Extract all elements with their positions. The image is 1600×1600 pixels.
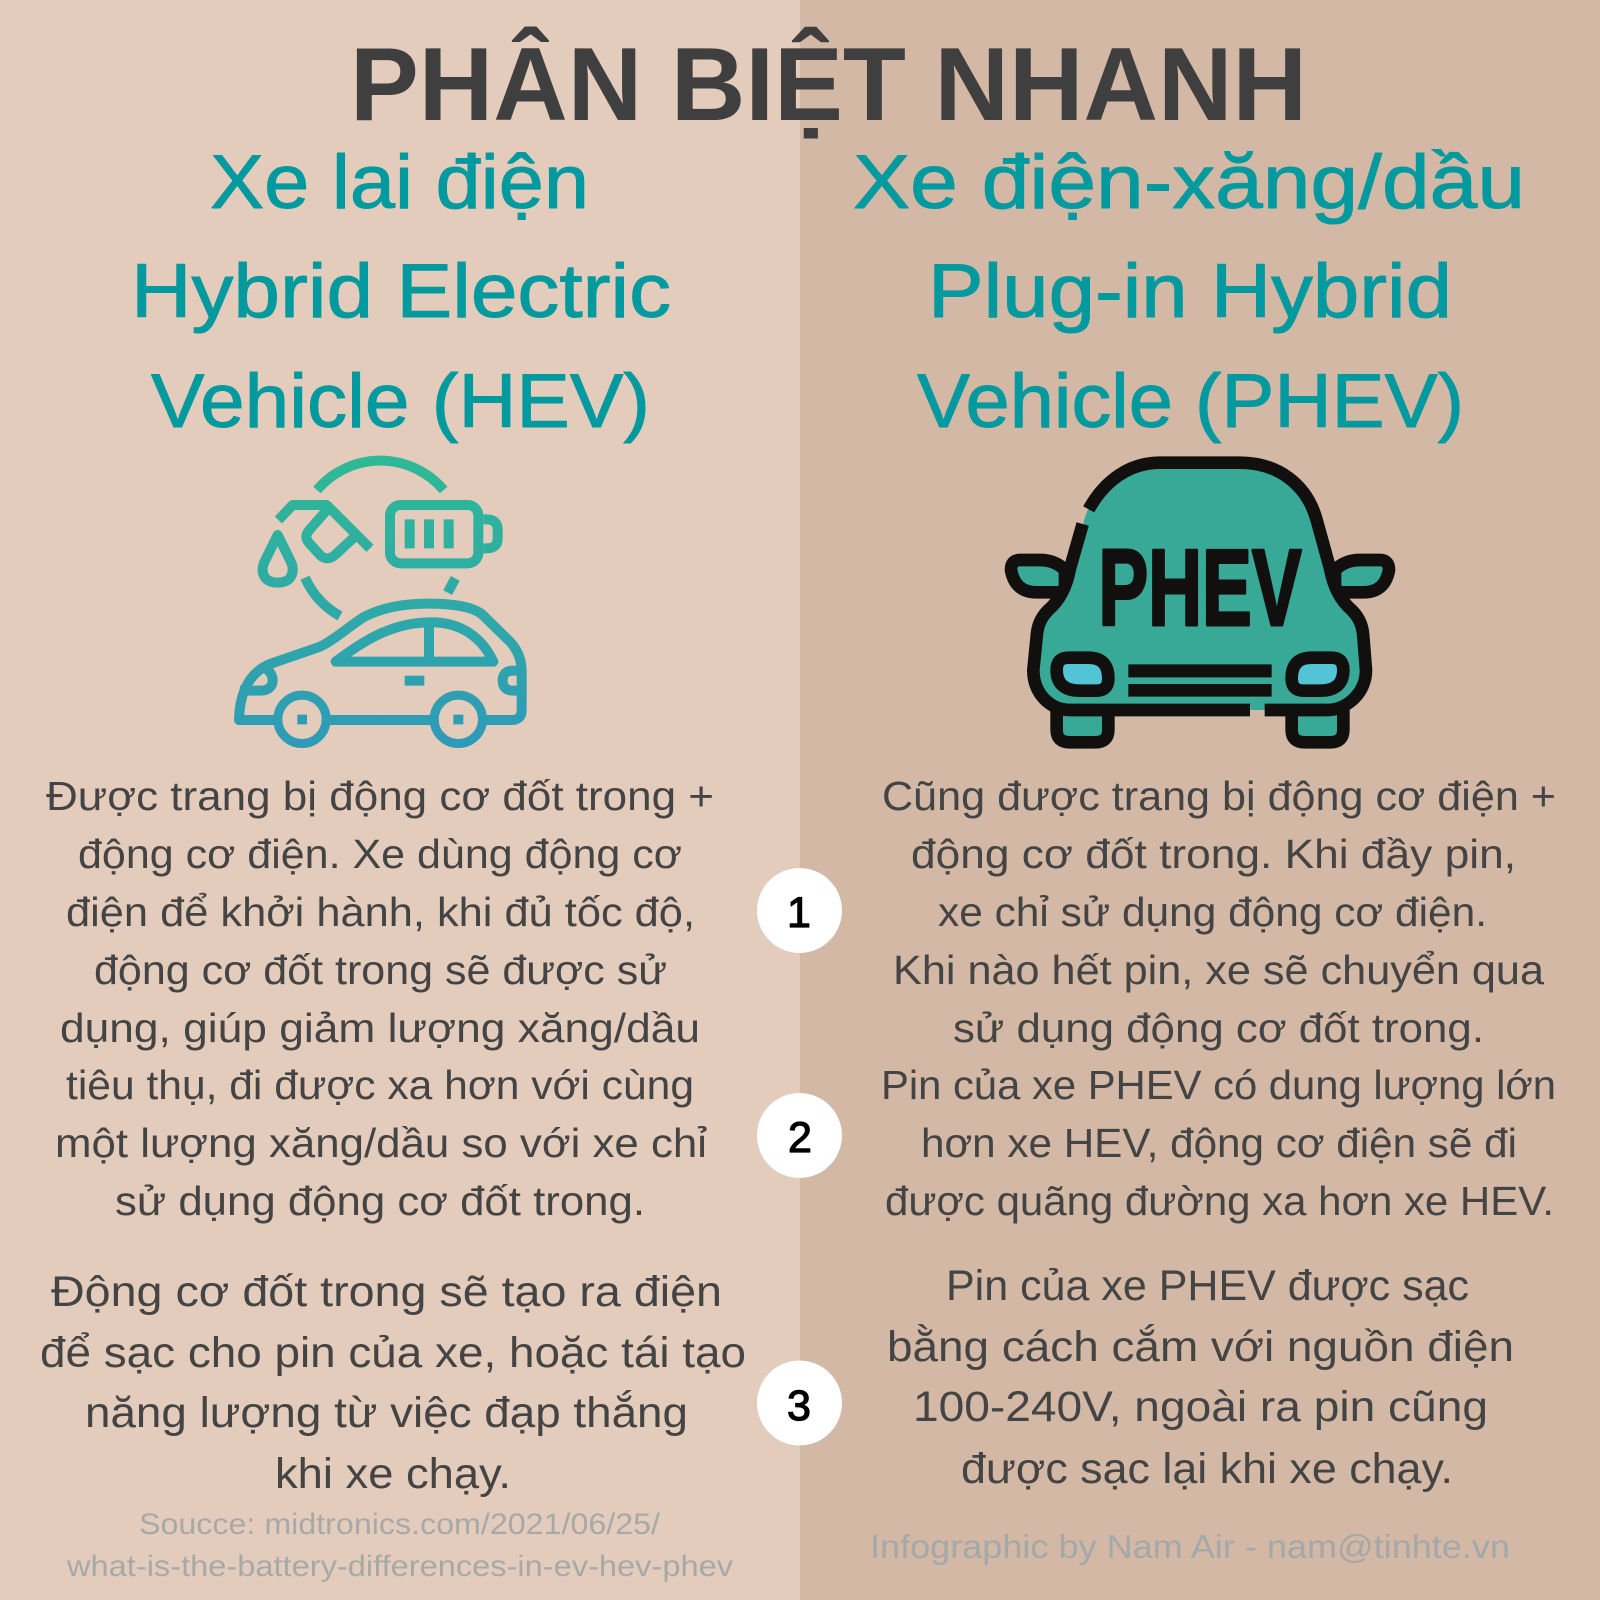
source note: Soucce: midtronics.com/2021/06/25/ bbox=[139, 1508, 661, 1541]
icon: HEV car with fuel and battery bbox=[239, 461, 522, 743]
text block: HEV point 1: tiêu thụ, đi được xa hơn với cùng bbox=[66, 1062, 694, 1108]
text block: PHEV points 1 and 2: Khi nào hết pin, xe sẽ chuyển qua bbox=[893, 947, 1544, 993]
heading: PHEV: Plug-in Hybrid bbox=[928, 249, 1452, 334]
text block: PHEV point 3: 100-240V, ngoài ra pin cũng bbox=[913, 1384, 1488, 1431]
icon part: wheels bbox=[1057, 703, 1343, 742]
heading: HEV: Xe lai điện bbox=[210, 140, 589, 225]
icon part: PHEV lettering: PHEV bbox=[1098, 527, 1302, 648]
text block: HEV point 1: động cơ đốt trong sẽ được sử bbox=[94, 947, 667, 993]
heading: PHEV bbox=[853, 140, 1525, 444]
text block: HEV point 1: một lượng xăng/dầu so với xe chỉ bbox=[55, 1120, 707, 1166]
icon part: wheels bbox=[278, 695, 482, 743]
icon part: cycle arcs bbox=[305, 461, 455, 616]
text block: HEV point 3: để sạc cho pin của xe, hoặc tái tạo bbox=[40, 1330, 746, 1377]
heading: HEV: Vehicle (HEV) bbox=[151, 359, 650, 444]
icon part: body outline bbox=[1033, 463, 1366, 710]
text block: HEV point 1: sử dụng động cơ đốt trong. bbox=[115, 1178, 645, 1224]
icon part: mirrors bbox=[1011, 560, 1389, 592]
text block: PHEV point 3: bằng cách cắm với nguồn điện bbox=[887, 1323, 1514, 1371]
icon part: fuel nozzle bbox=[278, 505, 370, 558]
text block: HEV point 1: Được trang bị động cơ đốt trong + bbox=[46, 773, 714, 819]
text block: PHEV points 1 and 2: hơn xe HEV, động cơ điện sẽ đi bbox=[921, 1120, 1517, 1166]
text block: PHEV points 1 and 2: sử dụng động cơ đốt trong. bbox=[953, 1005, 1484, 1051]
text block: HEV point 3 bbox=[40, 1269, 746, 1498]
text block: PHEV point 3 bbox=[887, 1263, 1514, 1493]
icon part: car body bbox=[239, 604, 522, 720]
text block: PHEV points 1 and 2: được quãng đường xa hơn xe HEV. bbox=[885, 1178, 1554, 1224]
panel: right background bbox=[800, 0, 1600, 1600]
text block: HEV point 3: Động cơ đốt trong sẽ tạo ra điện bbox=[51, 1269, 722, 1316]
text block: PHEV points 1 and 2: Pin của xe PHEV có dung lượng lớn bbox=[881, 1062, 1556, 1108]
panel: left background bbox=[0, 0, 800, 1600]
credit note: Infographic by Nam Air - nam@tinhte.vn bbox=[870, 1528, 1510, 1565]
heading: HEV: Hybrid Electric bbox=[131, 249, 671, 334]
number badge 1: 1 bbox=[787, 889, 811, 937]
heading: PHEV: Vehicle (PHEV) bbox=[917, 359, 1464, 444]
text block: HEV point 1: động cơ điện. Xe dùng động cơ bbox=[78, 831, 682, 877]
text block: PHEV points 1 and 2: động cơ đốt trong. Khi đầy pin, bbox=[911, 831, 1516, 877]
number badge 3 bbox=[757, 1360, 842, 1446]
number badge 2: 2 bbox=[788, 1114, 812, 1162]
text block: PHEV points 1 and 2: Cũng được trang bị động cơ điện + bbox=[882, 773, 1556, 819]
icon part: battery bbox=[390, 505, 498, 563]
icon part: grille bbox=[1128, 664, 1272, 697]
heading: PHEV: Xe điện-xăng/dầu bbox=[853, 140, 1525, 225]
text block: PHEV points 1 and 2 bbox=[881, 773, 1556, 1224]
icon part: fuel drop bbox=[263, 535, 293, 583]
source note bbox=[66, 1508, 733, 1583]
text block: PHEV point 3: Pin của xe PHEV được sạc bbox=[946, 1263, 1469, 1310]
text block: PHEV points 1 and 2: xe chỉ sử dụng động cơ điện. bbox=[938, 889, 1487, 935]
text block: HEV point 3: khi xe chạy. bbox=[275, 1451, 511, 1498]
number badge 1 bbox=[757, 868, 842, 953]
text block: HEV point 1 bbox=[46, 773, 714, 1224]
icon part: headlights bbox=[1057, 658, 1343, 691]
icon part: body fill bbox=[1033, 463, 1366, 710]
title: PHÂN BIỆT NHANH bbox=[350, 27, 1307, 143]
number badge 2 bbox=[757, 1093, 842, 1178]
text block: PHEV point 3: được sạc lại khi xe chạy. bbox=[961, 1446, 1453, 1493]
source note: what-is-the-battery-differences-in-ev-hev-phev bbox=[66, 1550, 733, 1583]
icon: PHEV car front bbox=[1011, 463, 1389, 742]
text block: HEV point 1: điện để khởi hành, khi đủ tốc độ, bbox=[66, 889, 695, 935]
text block: HEV point 1: dụng, giúp giảm lượng xăng/dầu bbox=[60, 1005, 700, 1051]
number badge 3: 3 bbox=[787, 1382, 811, 1430]
text block: HEV point 3: năng lượng từ việc đạp thắng bbox=[85, 1389, 688, 1437]
heading: HEV bbox=[131, 140, 671, 444]
